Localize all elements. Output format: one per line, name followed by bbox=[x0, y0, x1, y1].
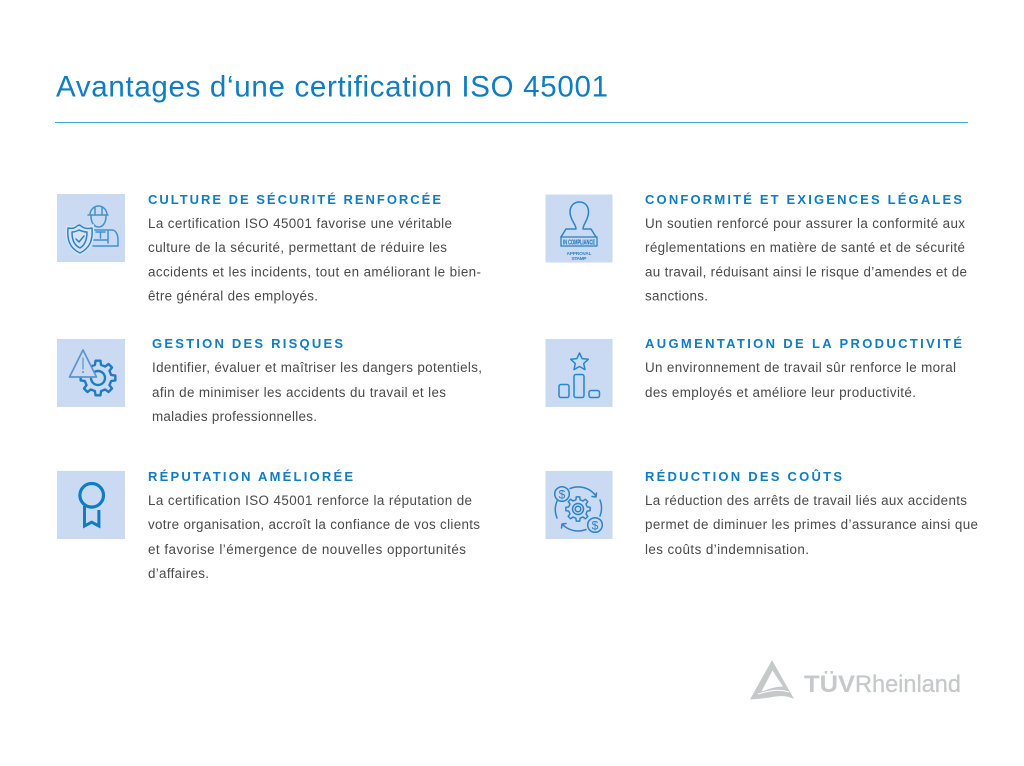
panel: réputation améliorée bbox=[57, 469, 480, 581]
text block: et favorise l’émergence de nouvelles opportunités bbox=[148, 542, 466, 557]
text block: La certification ISO 45001 renforce la réputation de bbox=[148, 493, 472, 508]
title: Avantages d‘une certification ISO 45001 bbox=[56, 70, 608, 104]
text block: Un soutien renforcé pour assurer la conformité aux bbox=[645, 216, 965, 231]
heading: CONFORMITÉ ET EXIGENCES LÉGALES bbox=[645, 192, 962, 207]
text block: La réduction des arrêts de travail liés aux accidents bbox=[645, 493, 967, 508]
text block: Un environnement de travail sûr renforce le moral bbox=[645, 360, 956, 375]
panel: gestion des risques bbox=[57, 336, 482, 424]
icon: award ribbon bbox=[57, 471, 125, 539]
text block: culture de la sécurité, permettant de réduire les bbox=[148, 240, 447, 255]
icon: gear and money cycle: $ bbox=[559, 488, 566, 502]
text block bbox=[645, 216, 967, 304]
text block bbox=[148, 216, 481, 304]
icon: gear and money cycle: $ bbox=[592, 518, 599, 532]
text block bbox=[645, 493, 978, 557]
text block: les coûts d’indemnisation. bbox=[645, 542, 809, 557]
text block: La certification ISO 45001 favorise une véritable bbox=[148, 216, 452, 231]
panel: augmentation de la productivité bbox=[546, 336, 962, 407]
text block: afin de minimiser les accidents du travail et les bbox=[152, 385, 446, 400]
icon: worker and shield bbox=[57, 194, 125, 262]
icon: warning and gear bbox=[57, 339, 125, 407]
heading: GESTION DES RISQUES bbox=[152, 336, 343, 351]
panel: conformité et exigences légales bbox=[546, 192, 967, 304]
heading: AUGMENTATION DE LA PRODUCTIVITÉ bbox=[645, 336, 962, 351]
text block bbox=[645, 360, 956, 400]
text block: d’affaires. bbox=[148, 566, 209, 581]
heading: CULTURE DE SÉCURITÉ RENFORCÉE bbox=[148, 192, 441, 207]
heading: RÉDUCTION DES COÛTS bbox=[645, 469, 842, 484]
text block bbox=[148, 493, 480, 581]
text block: au travail, réduisant ainsi le risque d’amendes et de bbox=[645, 264, 967, 280]
logo: TÜV Rheinland: Rheinland bbox=[855, 671, 961, 698]
icon: star and bars bbox=[546, 339, 612, 407]
text block bbox=[152, 360, 482, 424]
panel: culture de sécurité bbox=[57, 192, 481, 304]
text block: réglementations en matière de santé et de sécurité bbox=[645, 240, 965, 255]
icon: gear and money cycle bbox=[546, 471, 612, 539]
icon: approval stamp: STAMP bbox=[572, 256, 587, 262]
panel: réduction des coûts bbox=[546, 469, 978, 557]
text block: votre organisation, accroît la confiance de vos clients bbox=[148, 517, 480, 532]
text block: maladies professionnelles. bbox=[152, 409, 317, 424]
text block: Identifier, évaluer et maîtriser les dangers potentiels, bbox=[152, 360, 482, 375]
logo: TÜV Rheinland: TÜV bbox=[804, 671, 856, 698]
text block: des employés et améliore leur productivité. bbox=[645, 385, 916, 400]
text block: accidents et les incidents, tout en améliorant le bien- bbox=[148, 264, 481, 280]
text block: sanctions. bbox=[645, 288, 708, 304]
heading: RÉPUTATION AMÉLIORÉE bbox=[148, 469, 353, 484]
text block: permet de diminuer les primes d’assurance ainsi que bbox=[645, 517, 978, 532]
icon: approval stamp: APPROVAL bbox=[566, 251, 592, 257]
icon: approval stamp: IN COMPLIANCE bbox=[563, 239, 595, 246]
icon: approval stamp bbox=[546, 194, 612, 262]
logo: TÜV Rheinland bbox=[750, 660, 961, 700]
text block: être général des employés. bbox=[148, 288, 318, 304]
